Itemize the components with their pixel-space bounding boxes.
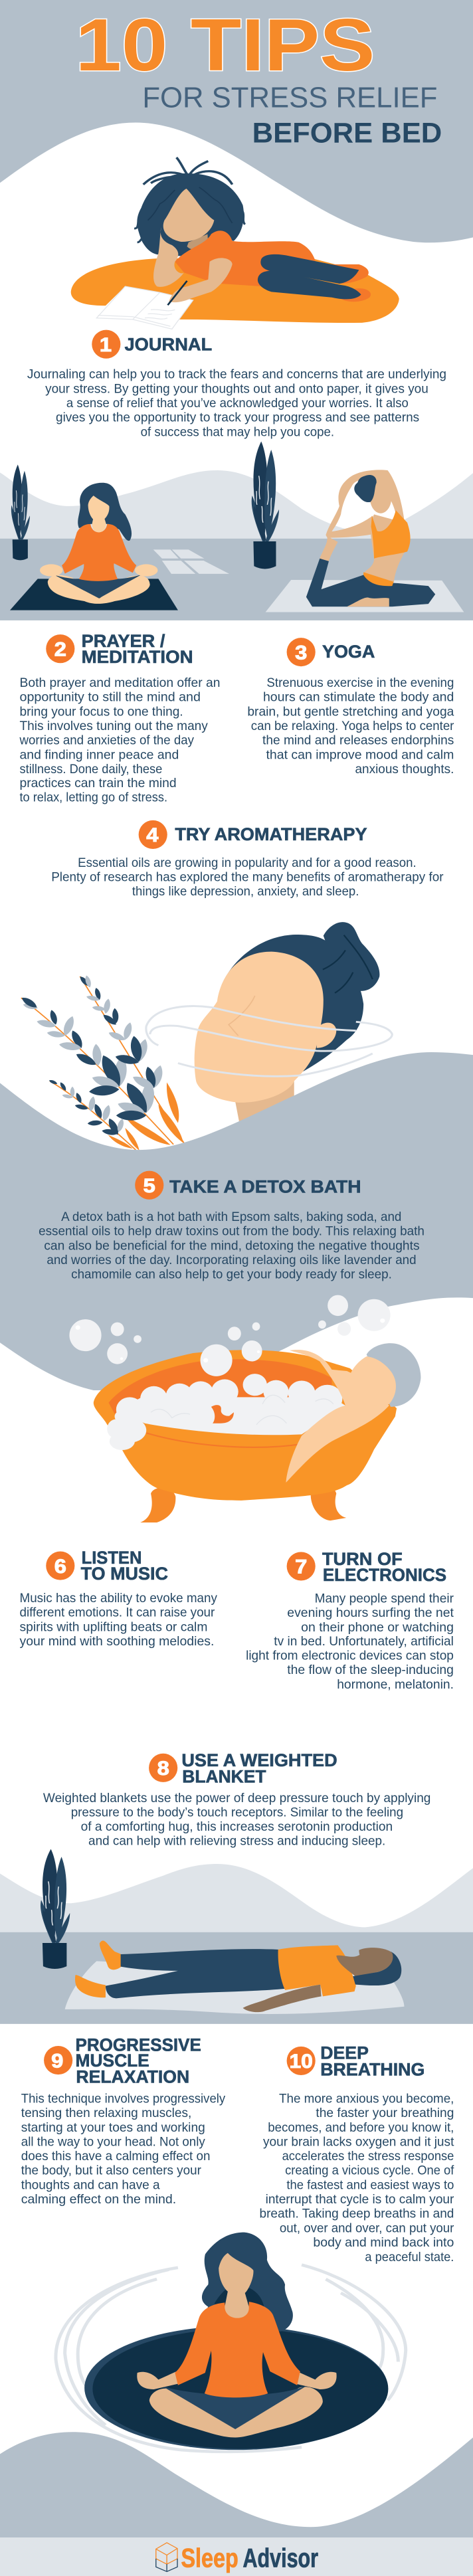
hands [137, 2371, 337, 2389]
text: yoga paragraph: that can improve mood and calm [266, 748, 454, 762]
meditation woman [10, 483, 178, 610]
yoga woman [266, 470, 464, 612]
number badge 2 [46, 634, 74, 663]
heading text: MEDITATION [82, 647, 193, 667]
number badge 9: 9 [51, 2050, 63, 2072]
hair shadow [214, 2288, 264, 2307]
feet [75, 1941, 122, 1997]
heading text: RELAXATION [76, 2067, 189, 2086]
text: electronics paragraph: tv in bed. Unfortunately, artificial [274, 1635, 454, 1649]
number badge 1: 1 [100, 333, 112, 356]
neck [187, 234, 208, 250]
text: detox bath paragraph: essential oils to help draw toxins out from the body. This relaxing bath [39, 1224, 425, 1238]
text: yoga paragraph [247, 676, 454, 777]
lavender stems [21, 976, 184, 1150]
text: music paragraph: your mind with soothing melodies. [20, 1635, 214, 1649]
text: progressive relaxation paragraph: starting at your toes and working [21, 2121, 205, 2135]
text: electronics paragraph: the flow of the sleep-inducing [287, 1663, 454, 1677]
heading: 7 turn of electronics [287, 1549, 446, 1585]
heading text [322, 1549, 446, 1585]
number badge 10: 10 [289, 2051, 313, 2072]
text: deep breathing paragraph [260, 2092, 454, 2264]
plant [41, 1849, 70, 1969]
shirt [278, 1945, 356, 1996]
floor [0, 539, 473, 620]
plant centre [252, 442, 279, 569]
text: prayer paragraph: and finding inner peace and [20, 748, 179, 762]
text: detox bath paragraph: can also be beneficial for the mind, detoxing the negative thoughts [44, 1239, 420, 1253]
text: prayer paragraph: Both prayer and meditation offer an [20, 676, 220, 690]
lavender orange leaves [108, 1083, 183, 1150]
tub feet [140, 1485, 346, 1522]
orange top [175, 230, 317, 286]
heading text: TRY AROMATHERAPY [175, 824, 367, 844]
wordmark: Advisor [243, 2543, 318, 2573]
text: weighted blanket paragraph: Weighted blankets use the power of deep pressure touch by applying [43, 1792, 430, 1805]
text: deep breathing paragraph: The more anxious you become, [279, 2092, 454, 2106]
number badge 4: 4 [146, 824, 159, 846]
text: journal paragraph: a sense of relief that you’ve acknowledged your worries. It also [66, 397, 409, 411]
heading text: BLANKET [182, 1766, 266, 1786]
blanket [65, 1961, 404, 2014]
text: yoga paragraph: hours can stimulate the body and [263, 690, 454, 704]
legs [149, 2387, 323, 2437]
legs [258, 254, 361, 299]
text: electronics paragraph: light from electronic devices can stop [246, 1649, 454, 1663]
heading: 4 try aromatherapy [139, 820, 367, 849]
number badge 9 [44, 2046, 72, 2074]
text: detox bath paragraph: and worries of the day. Incorporating relaxing oils like lavender and [47, 1253, 417, 1267]
illustration: woman smelling lavender [20, 922, 392, 1150]
number badge 10 [287, 2047, 316, 2075]
background wave: bottom [0, 2432, 473, 2538]
text: detox bath paragraph: A detox bath is a hot bath with Epsom salts, baking soda, and [61, 1210, 401, 1224]
bubble highlights [76, 1319, 385, 1362]
background wave: bath section [0, 1052, 473, 1390]
text: progressive relaxation paragraph: all the way to your head. Not only [21, 2135, 205, 2149]
text: prayer paragraph [19, 676, 220, 804]
writing arm [169, 258, 233, 302]
heading: 8 use a weighted blanket [149, 1750, 337, 1786]
number badge 3: 3 [295, 642, 307, 664]
number badge 8 [149, 1754, 177, 1782]
text: music paragraph: different emotions. It can raise your [20, 1606, 215, 1619]
number badge 1 [92, 330, 120, 359]
wordmark: Sleep [181, 2543, 238, 2573]
arm on cheek [153, 227, 184, 287]
nose line [229, 996, 255, 1036]
text: weighted blanket paragraph [43, 1792, 430, 1848]
text: yoga paragraph: brain, but gentle stretching and yoga [247, 705, 454, 719]
number badge 6: 6 [54, 1555, 66, 1578]
number badge 2: 2 [54, 638, 66, 660]
text: prayer paragraph: This involves tuning out the many [20, 719, 209, 733]
heading text [82, 631, 193, 667]
text: electronics paragraph: Many people spend their [315, 1592, 454, 1606]
floor [0, 1932, 473, 2024]
heading: 3 yoga [287, 638, 375, 666]
heading text [320, 2043, 425, 2079]
illustration: woman in bathtub [69, 1295, 421, 1522]
pen [167, 281, 187, 305]
text: journal paragraph: your stress. By getting your thoughts out and onto paper, it gives you [45, 382, 428, 396]
heading text: TURN OF [322, 1549, 403, 1569]
plant left [11, 464, 30, 560]
scent wisps [146, 1006, 392, 1076]
tub interior [108, 1359, 331, 1425]
tub rim line [146, 1433, 302, 1447]
heading text: YOGA [322, 642, 375, 662]
text: aromatherapy paragraph [51, 856, 444, 899]
text: yoga paragraph: anxious thoughts. [355, 763, 454, 777]
hair [134, 157, 245, 256]
scene: meditation and yoga room [0, 442, 473, 620]
heading text: LISTEN [82, 1548, 142, 1568]
text: weighted blanket paragraph: and can help with relieving stress and inducing sleep. [88, 1834, 385, 1848]
orange rug [71, 258, 399, 323]
number badge 7 [287, 1552, 316, 1580]
bubbles front [201, 1340, 262, 1376]
hair [353, 1952, 401, 1985]
neck [336, 1954, 377, 1976]
dark mat [84, 2326, 388, 2450]
footer band [0, 2537, 473, 2576]
heading text: USE A WEIGHTED [181, 1750, 337, 1770]
illustration: woman journaling [71, 157, 399, 329]
lavender stalk B [78, 975, 165, 1091]
heading text: PRAYER / [82, 631, 165, 651]
text: music paragraph: spirits with uplifting beats or calm [20, 1620, 207, 1634]
text: electronics paragraph: on their phone or watching [301, 1621, 454, 1635]
subtitle: before bed: BEFORE BED [252, 118, 442, 149]
open notebook [96, 286, 193, 329]
number badge 6 [46, 1552, 74, 1580]
text: progressive relaxation paragraph: This technique involves progressively [21, 2092, 226, 2106]
rubber duck [211, 1405, 234, 1424]
text: electronics paragraph: evening hours surfing the net [287, 1606, 454, 1620]
text: prayer paragraph: stillness. Done daily, these [20, 763, 162, 777]
hills [0, 470, 473, 539]
number badge 4 [139, 820, 167, 849]
icon: mattress stack [156, 2543, 177, 2571]
tub body [94, 1350, 397, 1501]
lavender stalk A [20, 995, 155, 1121]
text: deep breathing paragraph: the faster your breathing [316, 2106, 454, 2120]
text: deep breathing paragraph: out, over and over, can put your [280, 2221, 454, 2235]
face [195, 952, 324, 1103]
text: progressive relaxation paragraph: does this have a calming effect on [21, 2150, 210, 2163]
heading: 1 journal [92, 330, 212, 359]
text: prayer paragraph: practices can train the mind [20, 777, 177, 790]
heading: 6 listen to music [46, 1548, 168, 1584]
text: deep breathing paragraph: interrupt that cycle is to calm your [266, 2193, 454, 2207]
text: progressive relaxation paragraph: thoughts and can have a [21, 2178, 160, 2192]
text: deep breathing paragraph: your brain lacks oxygen and it just [263, 2135, 454, 2149]
text: aromatherapy paragraph: Essential oils are growing in popularity and for a good reason. [78, 856, 417, 870]
neck [235, 1081, 294, 1125]
text: deep breathing paragraph: a peaceful state. [365, 2251, 454, 2264]
logo: sleep advisor [156, 2543, 318, 2573]
heading text: ELECTRONICS [323, 1565, 446, 1585]
wordmark [181, 2543, 318, 2573]
scene: person lying on weighted blanket [0, 1849, 473, 2024]
heading text: TO MUSIC [81, 1564, 168, 1584]
text: aromatherapy paragraph: things like depression, anxiety, and sleep. [132, 885, 359, 899]
title: 10 tips: 10 TIPS [76, 4, 375, 86]
heading text: MUSCLE [76, 2051, 149, 2070]
text: electronics paragraph: hormone, melatonin. [337, 1678, 454, 1692]
heading text: TAKE A DETOX BATH [169, 1177, 361, 1196]
text: progressive relaxation paragraph: tensing then relaxing muscles, [21, 2106, 191, 2120]
text: deep breathing paragraph: breath. Taking deep breaths in and [260, 2207, 454, 2221]
feet [331, 264, 371, 302]
heading: 2 prayer / meditation [46, 631, 193, 667]
heading: 5 take a detox bath [135, 1171, 361, 1200]
text: progressive relaxation paragraph [21, 2092, 226, 2207]
shower cap [367, 1343, 421, 1407]
face [163, 189, 214, 242]
orange top [175, 2302, 300, 2397]
heading text: JOURNAL [125, 334, 212, 354]
text: yoga paragraph: the mind and releases endorphins [262, 733, 454, 747]
arm [243, 1985, 322, 2012]
heading text: PROGRESSIVE [76, 2035, 201, 2055]
heading text [181, 1750, 337, 1786]
bubbles [69, 1295, 391, 1364]
heading text [81, 1548, 168, 1584]
head [348, 1356, 396, 1406]
number badge 8: 8 [157, 1757, 169, 1780]
illustration: seated breathing meditation [56, 2233, 406, 2452]
text: prayer paragraph: bring your focus to one thing. [20, 705, 183, 719]
hair and bun [222, 922, 379, 1071]
heading text: BREATHING [320, 2060, 425, 2079]
floor window light [153, 549, 229, 574]
text: prayer paragraph: opportunity to still the mind and [20, 690, 201, 704]
heading text [76, 2035, 201, 2086]
text: prayer paragraph: worries and anxieties of the day [19, 733, 195, 747]
text: journal paragraph: of success that may help you cope. [141, 425, 334, 439]
number badge 5 [135, 1171, 163, 1200]
arm and body [286, 1350, 389, 1483]
pants [106, 1949, 285, 1998]
text: journal paragraph [27, 367, 446, 439]
text: detox bath paragraph [39, 1210, 425, 1281]
hair [201, 2233, 293, 2332]
text: music paragraph: Music has the ability to evoke many [20, 1592, 218, 1606]
hills [0, 1864, 473, 1934]
text: progressive relaxation paragraph: calming effect on the mind. [21, 2193, 176, 2207]
text: detox bath paragraph: chamomile can also help to get your body ready for sleep. [71, 1268, 392, 1281]
number badge 7: 7 [295, 1556, 307, 1578]
lavender stalk C [48, 1079, 125, 1136]
text: weighted blanket paragraph: of a comforting hug, this increases serotonin production [81, 1820, 393, 1834]
pants [163, 2385, 308, 2429]
face and neck [219, 2253, 253, 2318]
text: deep breathing paragraph: body and mind back into [313, 2236, 454, 2250]
number badge 5: 5 [143, 1174, 155, 1197]
ear [317, 1023, 336, 1048]
background wave: top [0, 0, 473, 242]
breath swirls [56, 2265, 406, 2452]
text: progressive relaxation paragraph: the body, but it also centers your [21, 2163, 201, 2177]
heading text: DEEP [320, 2043, 369, 2063]
text: electronics paragraph [246, 1592, 454, 1692]
text: prayer paragraph: to relax, letting go of stress. [20, 791, 167, 804]
text: music paragraph [20, 1592, 218, 1649]
heading: 9 progressive muscle relaxation [44, 2035, 201, 2086]
foam [107, 1374, 345, 1450]
text: journal paragraph: gives you the opportunity to track your progress and see patterns [56, 411, 419, 424]
subtitle: for stress relief: FOR STRESS RELIEF [142, 82, 437, 114]
text: weighted blanket paragraph: pressure to the body’s touch receptors. Similar to the feeling [71, 1805, 403, 1819]
heading: 10 deep breathing [287, 2043, 425, 2079]
face [359, 1948, 393, 1972]
